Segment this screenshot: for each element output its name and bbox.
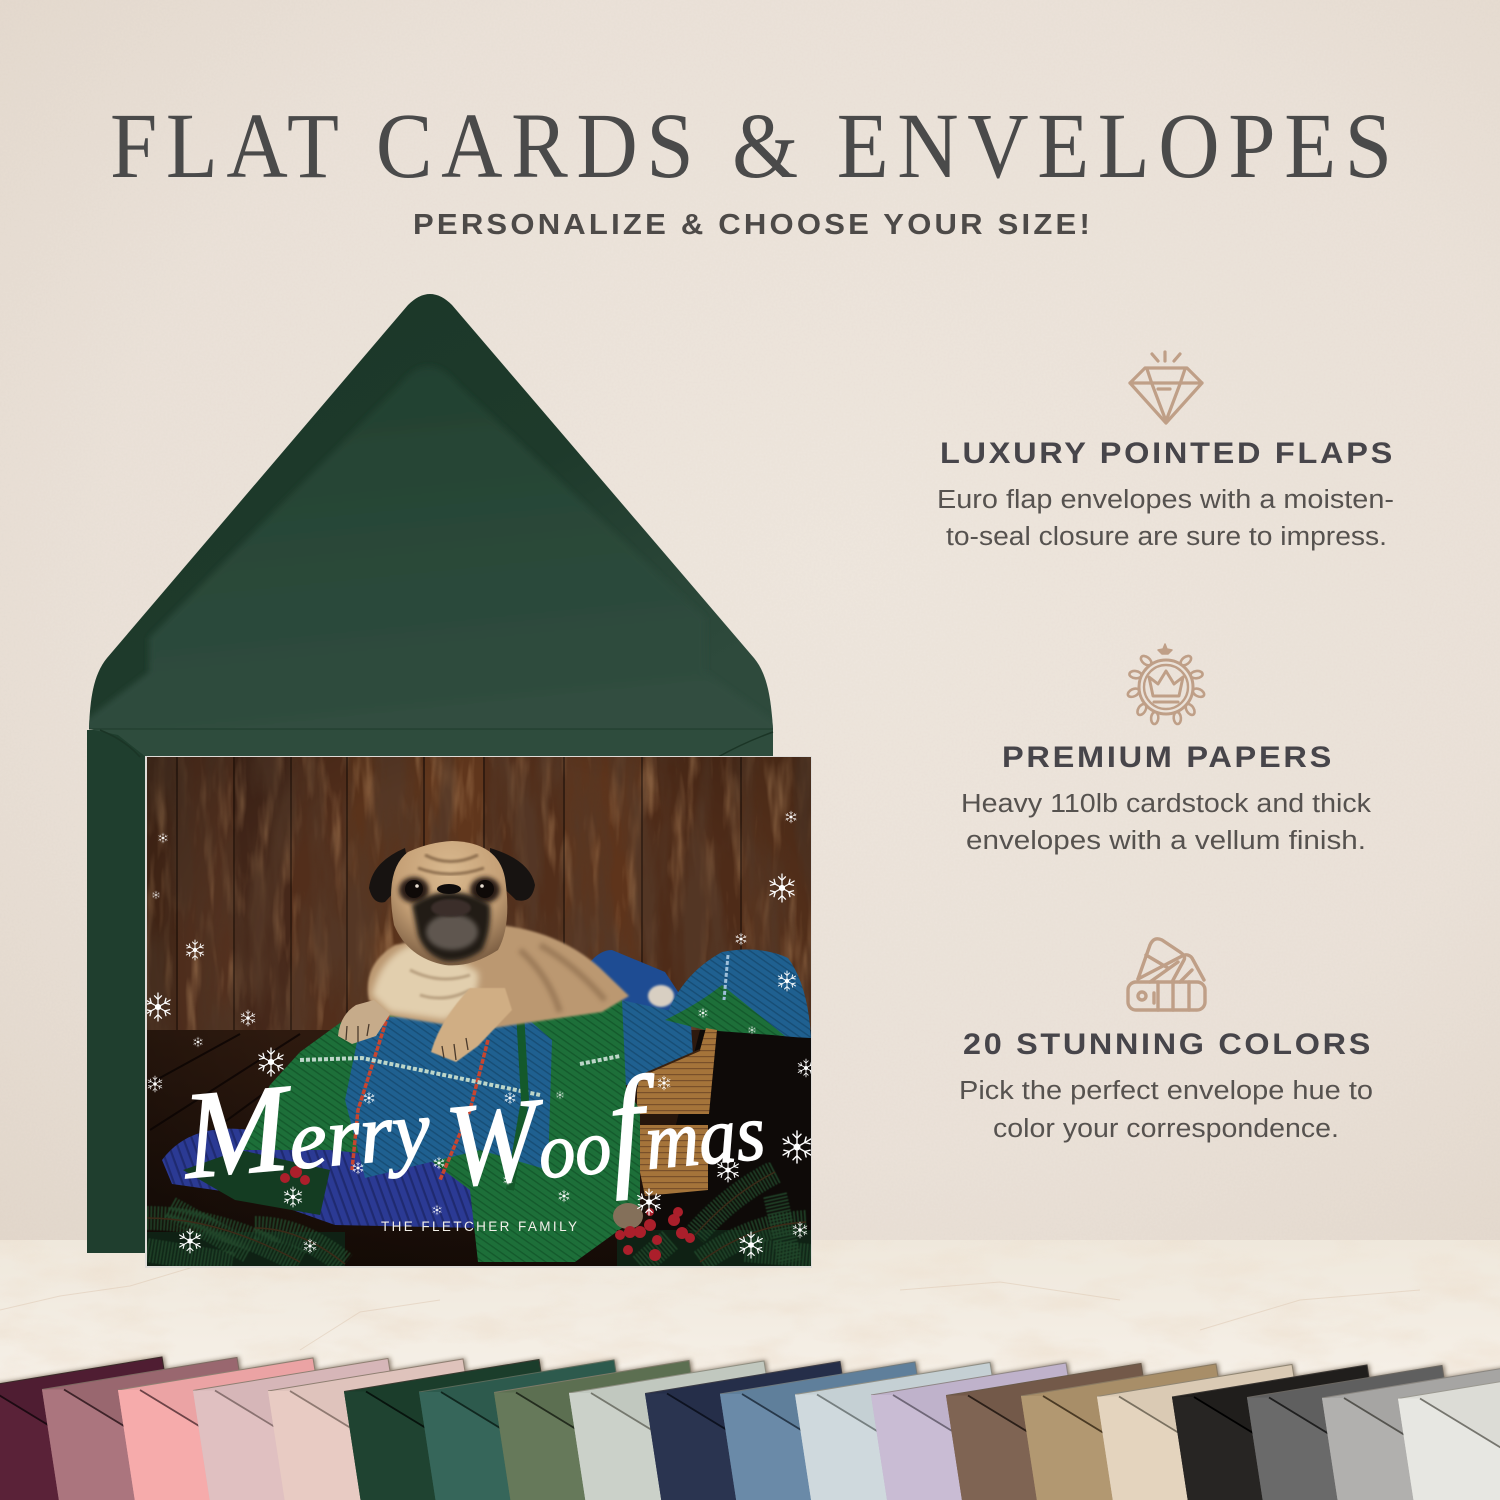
blue throw behind dog [590,950,693,1052]
swatch 1 wine [0,1357,167,1500]
swatch 7 teal [419,1360,619,1500]
pug muzzle [426,914,478,950]
envelope body [87,730,772,1253]
swatch 19 silver [1322,1366,1500,1500]
wood plank wall [147,757,811,1042]
marble floor [0,1240,1500,1500]
pinecone [613,1203,643,1229]
swatch 18 charcoal [1247,1366,1447,1500]
blue fringe lower left [162,1129,478,1228]
swatch 10 navy [645,1362,845,1500]
description: Heavy 110lb cardstock and thick [961,790,1371,818]
vignette [147,757,811,1266]
pug dark mask [412,892,490,961]
card paper edge [145,756,812,1268]
swatch 20 white [1398,1366,1500,1500]
heading: PREMIUM PAPERS [1002,741,1334,774]
description [961,790,1371,855]
swatch 6 forest [344,1360,544,1500]
soft shadow behind flap tips [0,1356,1500,1428]
description [937,486,1394,551]
plaid throw top right [665,950,811,1038]
swatch 14 mocha [946,1364,1146,1500]
feature: premium papers [961,644,1371,855]
swatch 9 pale green [569,1361,769,1500]
description: to-seal closure are sure to impress. [946,523,1387,551]
pug wrinkles [418,855,484,874]
feature: luxury pointed flaps [937,352,1395,551]
heading: 20 STUNNING COLORS [963,1028,1373,1061]
pug right paw [431,988,512,1062]
dark area right of crate [652,1030,811,1230]
wooden crate [630,1028,717,1196]
red berries [280,1166,695,1261]
swatch 2 mauve [42,1358,242,1500]
swatch 8 sage [494,1360,694,1500]
pug head [391,841,507,965]
swatch 4 blush [193,1358,393,1500]
lower left green fold [183,1150,330,1215]
envelope colour swatches row [0,1356,1500,1500]
icon: crown wreath [1127,644,1205,724]
pug eyes [405,880,423,898]
family name: THE FLETCHER FAMILY [381,1219,577,1234]
description: Pick the perfect envelope hue to [959,1077,1373,1105]
script greeting text [175,1040,769,1216]
description: envelopes with a vellum finish. [966,827,1366,855]
envelope liner [89,369,773,728]
swatch 15 tan [1021,1364,1221,1500]
pug body [368,925,629,1030]
swatch 11 dusty blue [720,1362,920,1500]
title: FLAT CARDS & ENVELOPES [110,94,1392,198]
description: Euro flap envelopes with a moisten- [937,486,1394,514]
pine branches [147,1172,811,1266]
subtitle: PERSONALIZE & CHOOSE YOUR SIZE! [413,209,1093,241]
swatch 17 black [1172,1365,1372,1500]
envelope throat strip [89,729,773,757]
pug ears [369,848,410,902]
blue plaid panel [345,1012,552,1178]
swatch 5 peach [268,1359,468,1500]
description [959,1077,1373,1143]
pug dog [338,841,629,1062]
snowflakes [146,811,814,1258]
script greeting text: Woofmas [440,1040,769,1216]
script greeting text: Merry [175,1047,435,1206]
icon: diamond [1130,352,1202,423]
icon: colour fan [1128,939,1205,1010]
pug left paw [338,1000,390,1044]
pug eye sockets [399,877,429,903]
white fur tuft [648,985,674,1007]
wood floor [147,1030,700,1266]
green envelope [60,294,800,1253]
feature: stunning colors [959,939,1373,1143]
heading: LUXURY POINTED FLAPS [940,437,1395,470]
swatch 3 pink [118,1358,318,1500]
swatch 16 cream [1097,1364,1297,1500]
envelope flap [89,294,773,729]
description: color your correspondence. [993,1115,1339,1143]
swatch 12 pale blue [795,1362,995,1500]
green blanket [240,1000,640,1262]
swatch 13 lilac [871,1363,1071,1500]
greeting card [145,756,814,1268]
plaid red and white stripes [300,1012,620,1190]
